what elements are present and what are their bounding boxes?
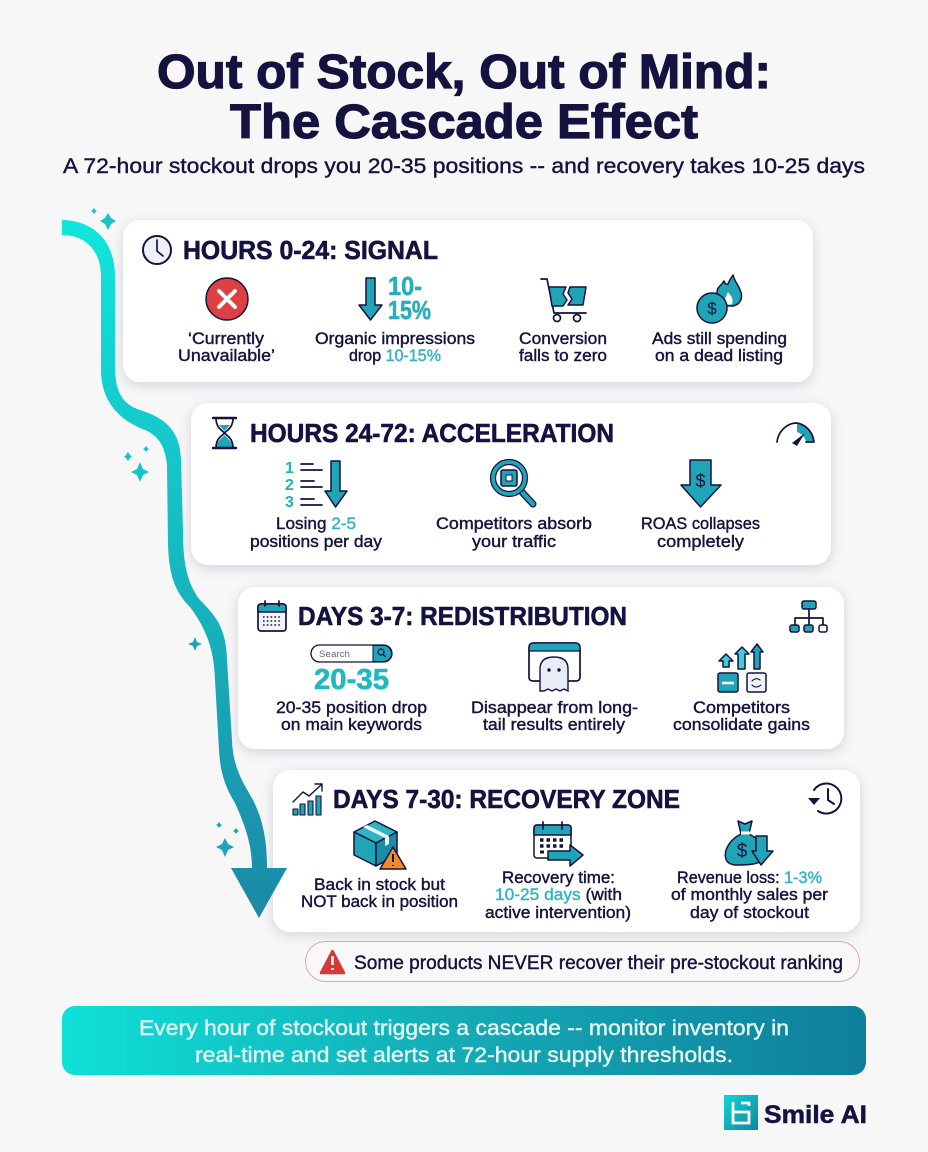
- title: Out of Stock, Out of Mind:: [157, 46, 771, 99]
- icon: red x: [206, 278, 248, 320]
- icon: burning coin: $: [707, 299, 717, 318]
- icon: hourglass: [213, 418, 236, 448]
- banner text: [139, 1017, 789, 1067]
- label: conversion: falls to zero: [519, 347, 607, 365]
- banner: takeaway: [62, 1006, 866, 1075]
- icon: ROAS arrow: [681, 460, 721, 507]
- icon: hierarchy: [790, 601, 827, 632]
- panel: hours 24-72 acceleration: [191, 403, 831, 565]
- stat: 10-15%: 15%: [388, 295, 431, 325]
- label: losing positions: positions per day: [250, 533, 383, 551]
- stat: 10-15%: 10-: [388, 271, 422, 301]
- icon: ranking list with arrow: [285, 460, 347, 511]
- label: competitors absorb: [436, 515, 592, 551]
- label: recovery time: active intervention): [485, 904, 631, 922]
- label: organic impressions: Organic impressions: [315, 330, 475, 348]
- panel: days 7-30 recovery zone: [273, 770, 860, 932]
- icon: money bag with down arrow: $: [737, 841, 748, 862]
- callout text: Some products NEVER recover their pre-stockout ranking: [354, 953, 843, 974]
- heading: days 7-30: DAYS 7-30: RECOVERY ZONE: [333, 786, 680, 814]
- label: revenue loss: day of stockout: [690, 904, 809, 922]
- label: consolidate: Competitors: [693, 699, 790, 717]
- label: disappear: Disappear from long-: [471, 699, 638, 717]
- label: organic impressions: [315, 330, 475, 365]
- logo: smile ai: [724, 1095, 867, 1130]
- label: ads: Ads still spending: [652, 330, 787, 348]
- heading: hours 0-24: HOURS 0-24: SIGNAL: [183, 237, 438, 265]
- label: position drop: on main keywords: [281, 716, 422, 734]
- label: position drop: 20-35 position drop: [276, 699, 427, 717]
- label: consolidate: consolidate gains: [673, 716, 810, 734]
- label: roas: ROAS collapses: [641, 515, 760, 533]
- label: currently unavailable: [178, 330, 275, 365]
- title: The Cascade Effect: [230, 96, 698, 149]
- icon: magnifier: [490, 460, 533, 504]
- label: back in stock: [301, 876, 458, 911]
- icon: clock: [143, 236, 171, 264]
- banner text: Every hour of stockout triggers a cascade -- monitor inventory in: [139, 1017, 789, 1040]
- label: losing positions: [250, 515, 383, 551]
- label: ads: [652, 330, 787, 365]
- icon: money bag with down arrow: [725, 821, 773, 865]
- icon: ghost window: [529, 643, 580, 691]
- title: [157, 46, 771, 149]
- label: revenue loss: Revenue loss: 1-3%: [677, 869, 822, 887]
- icon: search bar: [311, 645, 392, 662]
- icon: speedometer: [777, 423, 814, 446]
- icon: ranking list with arrow: 1: [285, 460, 294, 477]
- cascade arrow ribbon: [62, 220, 287, 918]
- stat: 20-35: 20-35: [314, 664, 389, 696]
- label: roas: completely: [657, 533, 745, 551]
- heading: days 3-7: DAYS 3-7: REDISTRIBUTION: [298, 603, 627, 631]
- label: recovery time: 10-25 days (with: [495, 886, 622, 904]
- icon: warning triangle: [321, 951, 344, 973]
- label: revenue loss: of monthly sales per: [671, 886, 829, 904]
- label: recovery time: Recovery time:: [502, 869, 615, 887]
- logo: smile ai: Smile AI: [764, 1101, 867, 1129]
- label: revenue loss: [671, 869, 829, 922]
- label: disappear: [471, 699, 638, 734]
- label: competitors absorb: your traffic: [472, 533, 556, 551]
- label: organic impressions: drop 10-15%: [349, 347, 441, 365]
- label: roas: [641, 515, 760, 551]
- panel: hours 0-24 signal: [123, 220, 813, 382]
- label: disappear: tail results entirely: [483, 716, 626, 734]
- icon: ranking list with arrow: 3: [285, 494, 294, 511]
- icon: box with warning: [354, 821, 406, 869]
- icon: down arrow: [359, 278, 382, 320]
- label: conversion: [519, 330, 607, 365]
- label: recovery time: [485, 869, 631, 922]
- icon: calendar: [258, 601, 286, 631]
- icon: broken cart: [541, 279, 586, 322]
- label: position drop: [276, 699, 427, 734]
- panel: days 3-7 redistribution: [238, 587, 844, 749]
- label: currently unavailable: ‘Currently: [188, 330, 265, 348]
- icon: search bar: Search: [319, 649, 350, 660]
- icon: history clock: [808, 784, 841, 814]
- label: conversion: Conversion: [519, 330, 607, 348]
- icon: burning coin: [697, 275, 742, 323]
- label: ads: on a dead listing: [655, 347, 783, 365]
- icon: competitor arrows: [718, 644, 766, 692]
- heading: hours 24-72: HOURS 24-72: ACCELERATION: [250, 420, 614, 448]
- icon: growth chart: [293, 784, 322, 815]
- icon: ROAS arrow: $: [695, 471, 706, 491]
- label: back in stock: NOT back in position: [301, 893, 458, 911]
- icon: ranking list with arrow: 2: [285, 477, 294, 494]
- callout: never recover: [306, 942, 860, 982]
- subtitle: A 72-hour stockout drops you 20-35 positions -- and recovery takes 10-25 days: [63, 154, 865, 178]
- label: competitors absorb: Competitors absorb: [436, 515, 592, 533]
- icon: calendar with arrow: [534, 822, 583, 866]
- label: back in stock: Back in stock but: [314, 876, 445, 894]
- banner text: real-time and set alerts at 72-hour supply thresholds.: [195, 1044, 733, 1067]
- label: consolidate: [673, 699, 810, 734]
- label: currently unavailable: Unavailable’: [178, 347, 275, 365]
- sparkles: [91, 208, 239, 857]
- stat: 10-15%: [388, 271, 431, 325]
- label: losing positions: Losing 2-5: [276, 515, 356, 533]
